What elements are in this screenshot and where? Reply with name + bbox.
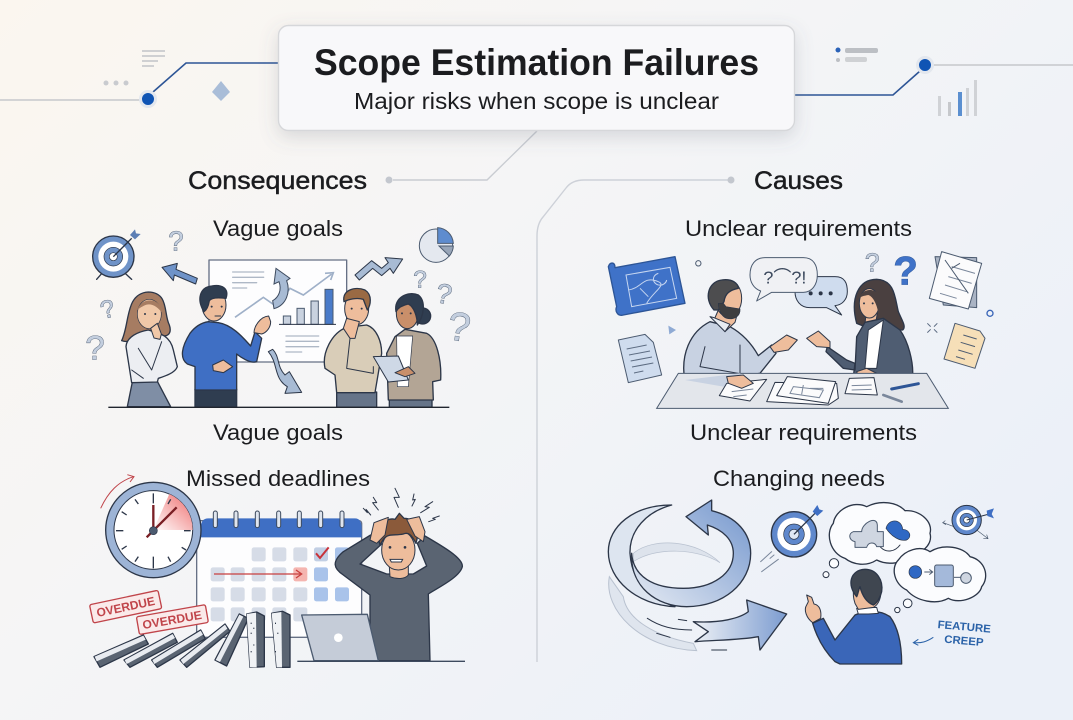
- speech bubble: confused: [750, 258, 817, 301]
- connector: causes and column divider: [537, 176, 734, 662]
- subtitle: Major risks when scope is unclear: [354, 88, 719, 114]
- overdue stamps: OVERDUE: [141, 608, 203, 632]
- question marks: ?: [865, 248, 879, 278]
- connector: consequences: [386, 131, 537, 184]
- small marks: [668, 261, 993, 334]
- crossed-out document: [929, 252, 982, 309]
- question marks: ?: [893, 249, 918, 293]
- question marks: ?: [168, 226, 184, 257]
- person: man from behind pointing: [805, 569, 902, 664]
- document: left: [618, 334, 662, 383]
- feature creep note: FEATURE: [937, 619, 991, 636]
- label: missed deadlines: Missed deadlines: [186, 466, 370, 491]
- laptop: [297, 614, 465, 661]
- calendar: [197, 511, 362, 637]
- question marks: [865, 248, 918, 293]
- title: Scope Estimation Failures: [314, 42, 759, 83]
- question marks: ?: [98, 295, 118, 325]
- question marks: ?: [413, 266, 427, 293]
- person: presenter in blue sweater: [182, 286, 271, 407]
- falling dominoes: [94, 611, 290, 667]
- icon: pie chart: [419, 228, 453, 262]
- table with papers: [657, 373, 948, 408]
- overdue stamps: [89, 590, 208, 635]
- thought cloud: puzzle: [829, 503, 931, 564]
- speech bubble: confused: ?⌒?!: [763, 267, 806, 287]
- overdue stamps: OVERDUE: [95, 594, 156, 620]
- connector: right header line: [795, 58, 1073, 95]
- title card: [278, 26, 794, 130]
- blueprint: [608, 257, 685, 315]
- checklist note: [944, 323, 985, 368]
- arrow: squiggle down: [268, 349, 302, 393]
- person: bearded man: [684, 280, 797, 383]
- person: man thinking in beige: [324, 288, 382, 407]
- illustration: changing needs: [608, 500, 994, 664]
- clock: [101, 475, 201, 578]
- icon: bars: [938, 80, 977, 116]
- person: woman in blazer: [807, 279, 913, 380]
- icon: list: [836, 48, 878, 62]
- connector: left header line: [0, 63, 278, 106]
- icon: text lines: [142, 51, 165, 66]
- person: thinking woman: [122, 292, 177, 407]
- question marks: ?: [85, 330, 105, 368]
- thought bubbles: [823, 559, 912, 613]
- thought cloud: process: [894, 547, 986, 602]
- whiteboard with chart: [209, 260, 347, 362]
- feature creep note: [913, 619, 991, 649]
- icon: three dots: [104, 80, 128, 86]
- stressed man: [335, 488, 462, 661]
- icon: target: [761, 505, 823, 572]
- question marks: [85, 226, 473, 368]
- question marks: ?: [434, 277, 454, 310]
- arrow: zigzag: [355, 258, 403, 280]
- heading: causes: Causes: [754, 167, 843, 195]
- illustration: unclear requirements meeting: [608, 248, 993, 408]
- icon: diamond: [212, 81, 230, 101]
- label: unclear requirements top: Unclear requirements: [685, 216, 912, 241]
- question marks: ?: [445, 304, 473, 351]
- speech bubble: dots: [795, 277, 847, 315]
- arrow: left: [162, 263, 197, 284]
- person: woman with tablet: [373, 294, 441, 407]
- spiral arrows: [608, 500, 787, 651]
- icon: target: [93, 229, 141, 279]
- ground line: [108, 405, 449, 409]
- illustration: missed deadlines: [89, 475, 465, 667]
- small target with arrows: [943, 505, 994, 539]
- label: vague goals bottom: Vague goals: [213, 420, 343, 445]
- label: vague goals top: Vague goals: [213, 216, 343, 241]
- label: unclear requirements bottom: Unclear requirements: [690, 420, 917, 445]
- illustration: vague goals team at whiteboard: [85, 226, 473, 407]
- feature creep note: CREEP: [944, 634, 984, 649]
- label: changing needs: Changing needs: [713, 466, 885, 491]
- heading: consequences: Consequences: [188, 167, 367, 195]
